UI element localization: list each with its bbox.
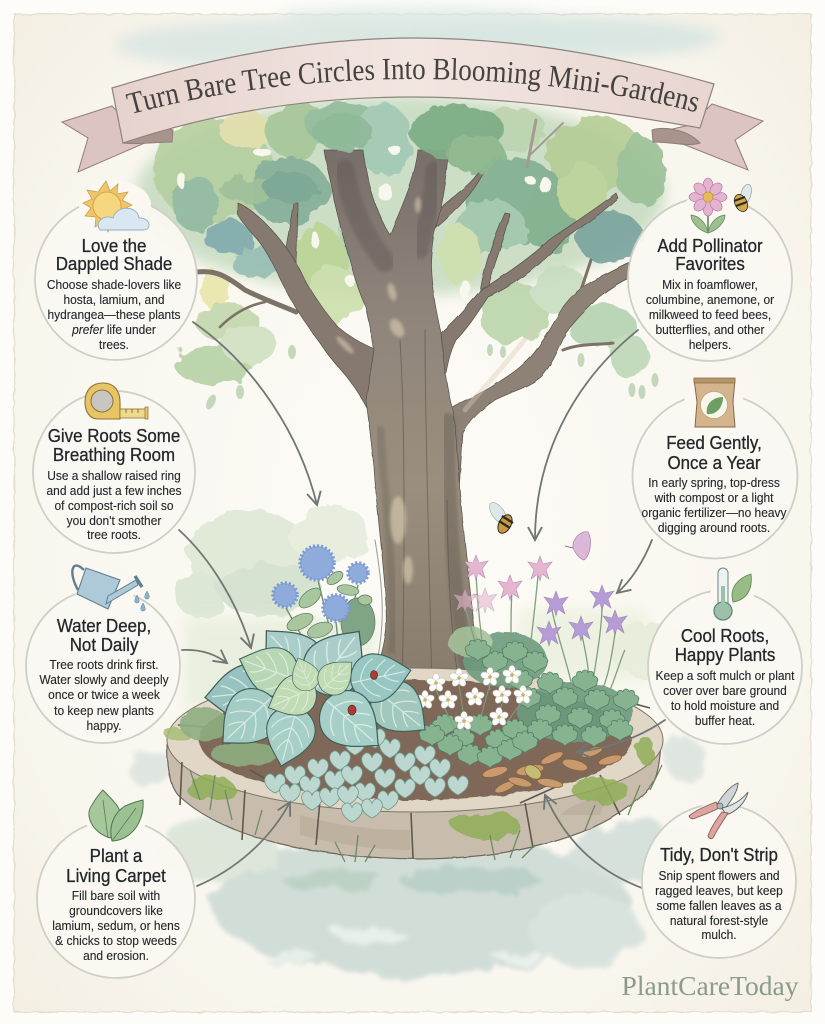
- icon: watering can: [72, 566, 149, 611]
- panel: cool roots, happy plants: buffer heat.: [695, 713, 755, 728]
- panel: add pollinator favorites: milkweed to feed bees,: [649, 307, 771, 322]
- panel: plant a living carpet: Fill bare soil with: [72, 888, 160, 903]
- panel: cool roots, happy plants: cover over bare ground: [663, 683, 787, 698]
- panel: tidy, don't strip: Snip spent flowers and: [659, 868, 779, 883]
- panel: give roots some breathing room: you don't smother: [67, 513, 161, 528]
- moss patches: [166, 727, 658, 839]
- panel: tidy, don't strip: Tidy, Don't Strip: [660, 844, 778, 865]
- panel: tidy, don't strip: natural forest-style: [670, 913, 768, 928]
- canopy light flecks: [177, 145, 551, 300]
- tree canopy: [135, 95, 666, 411]
- panel: add pollinator favorites: butterflies, and other: [655, 322, 765, 337]
- panel: water deep, not daily: Water Deep,: [57, 615, 151, 636]
- icon: sun and cloud: [79, 181, 151, 232]
- ribbon tails: [62, 104, 763, 172]
- panel: feed gently, once a year: with compost or a light: [654, 490, 774, 505]
- panel: water deep, not daily: Tree roots drink first.: [49, 657, 159, 672]
- canopy over the fork tops: [220, 106, 507, 204]
- panel: feed gently, once a year: Feed Gently,: [666, 432, 762, 453]
- panel: add pollinator favorites: Mix in foamflower,: [662, 277, 758, 292]
- columbine plants: [448, 555, 639, 747]
- raised stone ring: [166, 668, 663, 859]
- panel: water deep, not daily: Not Daily: [70, 634, 138, 655]
- sky wash: [115, 7, 720, 71]
- hydrangea: [273, 546, 375, 660]
- panel: plant a living carpet: groundcovers like: [69, 903, 163, 918]
- icon: tape measure: [85, 383, 148, 419]
- icon: leaves: [86, 790, 146, 841]
- icon: pruners: [689, 783, 748, 839]
- arrows: [179, 322, 665, 888]
- panel: give roots some breathing room: of compost-rich soil so: [55, 498, 173, 513]
- panel: tidy, don't strip: some fallen leaves as a: [657, 898, 782, 913]
- panel: love the dappled shade: prefer life under: [71, 322, 156, 337]
- panel: feed gently, once a year: [632, 394, 798, 558]
- panel: water deep, not daily: happy.: [86, 718, 122, 733]
- panel: water deep, not daily: to keep new plants: [54, 703, 154, 718]
- panel: water deep, not daily: once or twice a week: [48, 687, 160, 702]
- panel: love the dappled shade: hosta, lamium, and: [63, 292, 165, 307]
- panel: feed gently, once a year: Once a Year: [667, 452, 761, 473]
- panel: love the dappled shade: Dappled Shade: [56, 253, 172, 274]
- panel: love the dappled shade: trees.: [99, 337, 129, 352]
- panel: give roots some breathing room: Breathing Room: [53, 444, 175, 465]
- flying bee: [486, 500, 515, 536]
- grass tufts: [190, 765, 662, 862]
- panel: plant a living carpet: lamium, sedum, or hens: [52, 918, 180, 933]
- panel: give roots some breathing room: [33, 391, 195, 553]
- falling leaf shapes: [204, 344, 658, 411]
- title ribbon: Turn Bare Tree Circles Into Blooming Mini-Gardens: [126, 58, 698, 114]
- lamium silver leaves: [265, 729, 468, 822]
- panel: cool roots, happy plants: Cool Roots,: [681, 625, 769, 646]
- bark shading: [345, 170, 540, 700]
- panel: add pollinator favorites: [628, 197, 792, 361]
- panel: plant a living carpet: Living Carpet: [66, 865, 166, 886]
- panel: add pollinator favorites: Favorites: [675, 253, 745, 274]
- panel: feed gently, once a year: organic fertilizer—no heavy: [642, 505, 787, 520]
- panel: love the dappled shade: hydrangea—these plants: [48, 307, 180, 322]
- background shrubs and ground wash: [128, 505, 715, 975]
- panel: love the dappled shade: Choose shade-lovers like: [47, 277, 181, 292]
- title ribbon: [61, 37, 764, 173]
- panel: feed gently, once a year: In early spring, top-dress: [648, 475, 780, 490]
- panel: feed gently, once a year: digging around roots.: [658, 520, 770, 535]
- fern foliage: [465, 639, 639, 747]
- mulch leaves: [481, 744, 623, 795]
- panel: water deep, not daily: Water slowly and deeply: [39, 672, 169, 687]
- panel: love the dappled shade: [35, 198, 197, 360]
- panel: love the dappled shade: Love the: [82, 235, 146, 256]
- panel: plant a living carpet: and erosion.: [83, 948, 149, 963]
- hosta: [202, 611, 441, 772]
- panel: tidy, don't strip: [642, 804, 796, 958]
- ribbon body: [112, 38, 714, 143]
- panel: give roots some breathing room: and add just a few inches: [47, 483, 181, 498]
- panel: add pollinator favorites: Add Pollinator: [657, 235, 763, 256]
- panel: add pollinator favorites: columbine, anemone, or: [646, 292, 774, 307]
- butterfly: [565, 532, 591, 560]
- icon: thermometer and leaf: [710, 568, 754, 621]
- watermark: PlantCareToday: [622, 971, 799, 1001]
- tree trunk and branches: [197, 120, 629, 708]
- icon: flower and bee: [684, 178, 753, 233]
- title text: [132, 79, 695, 114]
- panel: give roots some breathing room: tree roots.: [87, 527, 141, 542]
- anemone plant: [415, 665, 538, 768]
- panel: plant a living carpet: [37, 820, 195, 978]
- panel: cool roots, happy plants: to hold moisture and: [671, 698, 779, 713]
- panel: cool roots, happy plants: [648, 590, 802, 744]
- panel: give roots some breathing room: Use a shallow raised ring: [47, 468, 181, 483]
- panel: water deep, not daily: [26, 589, 180, 743]
- icon: fertilizer bag: [684, 378, 744, 431]
- panel: give roots some breathing room: Give Roots Some: [48, 425, 180, 446]
- groundcovers: [180, 707, 468, 822]
- bark highlights: [334, 197, 421, 584]
- ladybugs: [348, 670, 378, 715]
- panel: plant a living carpet: & chicks to stop weeds: [55, 933, 177, 948]
- panel: cool roots, happy plants: Happy Plants: [675, 644, 775, 665]
- panel: tidy, don't strip: ragged leaves, but keep: [655, 883, 783, 898]
- panel: plant a living carpet: Plant a: [90, 845, 142, 866]
- panel: add pollinator favorites: helpers.: [689, 337, 731, 352]
- panel: cool roots, happy plants: Keep a soft mulch or plant: [656, 668, 795, 683]
- panel: tidy, don't strip: mulch.: [701, 927, 737, 942]
